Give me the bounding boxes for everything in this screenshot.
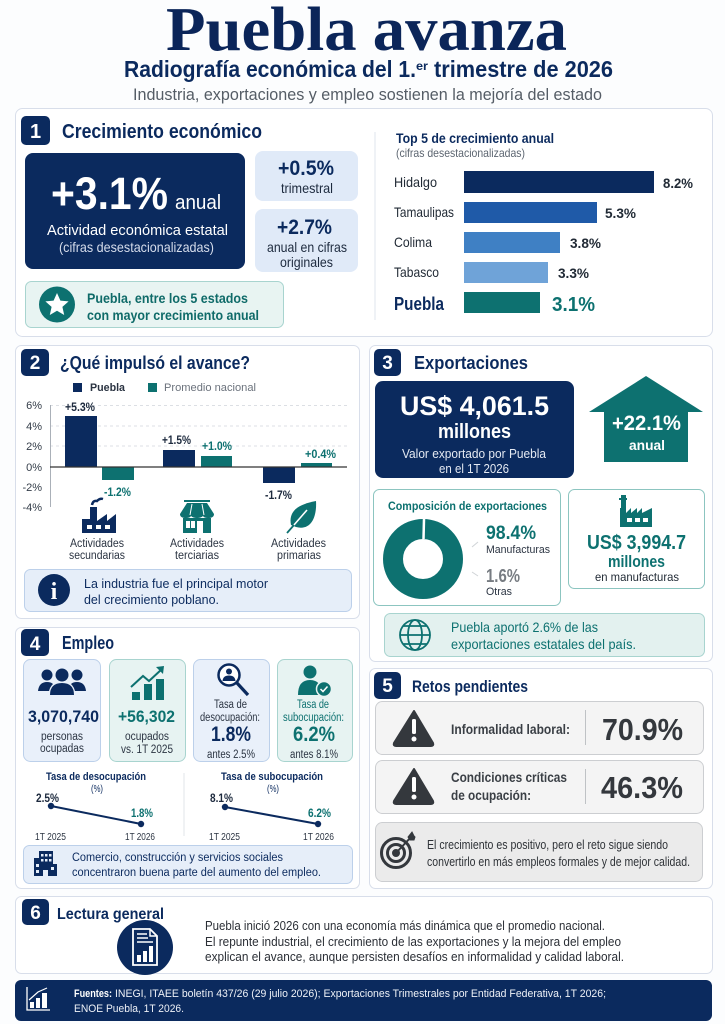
legend: Promedio nacional: [164, 382, 256, 394]
activity labels: Actividades: [271, 538, 326, 550]
KPI: +2.7% anual en cifras originales: originales: [280, 254, 333, 270]
subtitle: trimestre de 2026: [434, 56, 613, 82]
KPI: valor exportado: en el 1T 2026: [439, 461, 509, 476]
KPI: valor exportado: Valor exportado por Puebla: [402, 446, 547, 461]
bar chart: actividades: -1.2%: [104, 485, 131, 499]
reto: condiciones críticas: 46.3%: [601, 770, 683, 805]
section badge 4: [21, 629, 49, 656]
main KPI: +3.1% anual: Actividad económica estatal: [47, 222, 228, 239]
card: tasa de desocupación: 1.8%: [211, 723, 251, 746]
bar chart: actividades: 2%: [26, 441, 42, 453]
card: tasa de subocupación: Tasa de: [297, 699, 329, 711]
subtitle: [124, 56, 613, 82]
card: nuevos ocupados: +56,302: [118, 707, 175, 726]
panel: exportaciones de manufacturas: millones: [608, 552, 665, 571]
main KPI: +3.1% anual: (cifras desestacionalizadas): [59, 239, 214, 255]
activity labels: terciarias: [175, 550, 219, 562]
heading: empleo: Empleo: [62, 633, 114, 653]
icon: factory: [82, 499, 116, 533]
KPI: +0.5% trimestral: [255, 151, 358, 201]
bar chart: actividades: -2%: [22, 482, 42, 494]
line chart: tasa de desocupación: 1T 2026: [125, 832, 155, 843]
callout: industria: del crecimiento poblano.: [84, 592, 219, 607]
heading: retos pendientes: Retos pendientes: [412, 677, 528, 696]
reto: condiciones críticas: Condiciones críticas: [451, 770, 567, 785]
bar chart: actividades: -1.7%: [265, 488, 292, 502]
icon: info: i: [51, 579, 58, 605]
activity labels: Actividades: [70, 538, 124, 550]
reto: informalidad laboral: Informalidad laboral:: [451, 722, 570, 737]
line chart: tasa de desocupación: 2.5%: [36, 793, 59, 805]
section badge 2: 2: [30, 353, 40, 374]
icon: star: [39, 286, 75, 322]
panel: exportaciones de manufacturas: [568, 490, 704, 588]
text: lectura general: [205, 919, 624, 964]
footer: fuentes: INEGI, ITAEE boletín 437/26 (29 julio 2026); Exportaciones Trimestrales por Entidad Federativa, 1T 2026;: [115, 988, 606, 1000]
footer: fuentes: [15, 980, 712, 1021]
icon: person check: [298, 666, 332, 696]
icon: growth chart: [131, 666, 164, 700]
KPI: valor exportado: millones: [438, 421, 511, 443]
card: tasa de desocupación: Tasa de: [214, 699, 247, 711]
callout: comercio y construcción: Comercio, construcción y servicios sociales: [72, 852, 283, 864]
panel: exportaciones de manufacturas: US$ 3,994.7: [587, 532, 686, 554]
activity labels: [69, 538, 326, 562]
icon: store: [180, 500, 214, 533]
card: nuevos ocupados: ocupados: [125, 731, 169, 743]
bar chart: actividades: +0.4%: [305, 447, 336, 461]
line chart: tasa de desocupación: [35, 771, 155, 843]
text: lectura general: El repunte industrial, el crecimiento de las exportaciones y la mejora del empleo: [205, 935, 621, 949]
card: tasa de desocupación: desocupación:: [200, 712, 260, 724]
panel: composición de exportaciones: 98.4%: [486, 523, 536, 544]
section badge 5: [374, 672, 401, 699]
KPI: +2.7% anual en cifras originales: [255, 209, 358, 272]
line chart: tasa de desocupación: Tasa de desocupación: [46, 771, 146, 783]
bar chart: top 5 de crecimiento anual: Hidalgo: [394, 174, 437, 190]
bar chart: top 5 de crecimiento anual: Colima: [394, 234, 432, 250]
tagline: Industria, exportaciones y empleo sostienen la mejoría del estado: [133, 85, 602, 104]
callout: top 5 estados: Puebla, entre los 5 estados: [87, 290, 248, 306]
KPI: +0.5% trimestral: +0.5%: [278, 157, 334, 180]
icon: warning: [394, 711, 433, 746]
line chart: tasa de desocupación: (%): [91, 784, 103, 795]
callout: industria: [24, 570, 352, 612]
callout: aportación nacional: [384, 614, 704, 656]
panel: lectura general: [16, 896, 712, 975]
section badge 1: [21, 116, 50, 145]
section badge 1: 1: [30, 121, 41, 143]
panel: qué impulsó el avance: [16, 346, 360, 618]
panel: crecimiento económico: [16, 108, 712, 336]
card: tasa de desocupación: antes 2.5%: [207, 749, 255, 761]
icon: globe: [400, 620, 430, 650]
callout: reto empleo formal: El crecimiento es positivo, pero el reto sigue siendo: [427, 838, 668, 852]
line chart: tasa de desocupación: 1T 2025: [35, 832, 66, 843]
bar chart: actividades: +1.5%: [162, 433, 191, 447]
heading: lectura general: Lectura general: [57, 906, 164, 923]
line chart: tasa de subocupación: 6.2%: [308, 808, 331, 820]
card: tasa de subocupación: antes 8.1%: [290, 749, 338, 761]
panel: exportaciones: [370, 346, 712, 662]
bar chart: actividades: 4%: [26, 421, 42, 433]
bar chart: top 5 de crecimiento anual: Puebla: [394, 294, 445, 314]
heading: crecimiento económico: Crecimiento económico: [62, 121, 262, 143]
card: tasa de desocupación: [194, 660, 270, 762]
panel: composición de exportaciones: 1.6%: [486, 566, 520, 586]
callout: aportación nacional: Puebla aportó 2.6% de las: [451, 619, 598, 635]
bar chart: top 5 de crecimiento anual: 8.2%: [663, 175, 694, 191]
icon: chart: [27, 987, 50, 1010]
bar chart: actividades: +1.0%: [202, 439, 232, 453]
card: personas ocupadas: ocupadas: [40, 743, 84, 755]
bar chart: actividades: +5.3%: [65, 400, 95, 414]
heading: qué impulsó el avance: ¿Qué impulsó el avance?: [60, 353, 250, 373]
card: tasa de subocupación: subocupación:: [283, 712, 344, 724]
panel: retos pendientes: [370, 668, 712, 888]
panel: composición de exportaciones: Composición de exportaciones: [388, 499, 547, 513]
bar chart: top 5 de crecimiento anual: 3.1%: [552, 294, 595, 316]
bar chart: top 5 de crecimiento anual: 5.3%: [605, 205, 637, 221]
line chart: tasa de subocupación: 1T 2026: [303, 832, 334, 843]
text: lectura general: Puebla inició 2026 con una economía más dinámica que el promedio nacional.: [205, 919, 605, 933]
line chart: tasa de subocupación: Tasa de subocupación: [221, 771, 323, 783]
card: personas ocupadas: 3,070,740: [28, 707, 99, 726]
footer: fuentes: ENOE Puebla, 1T 2026.: [74, 1003, 184, 1015]
heading: exportaciones: Exportaciones: [414, 353, 528, 373]
callout: comercio y construcción: concentraron buena parte del aumento del empleo.: [72, 867, 321, 879]
KPI: +2.7% anual en cifras originales: +2.7%: [277, 216, 332, 239]
bar chart: actividades: 0%: [26, 462, 42, 474]
line chart: tasa de subocupación: (%): [267, 784, 279, 795]
activity labels: secundarias: [69, 550, 125, 562]
line chart: tasa de subocupación: 8.1%: [210, 793, 233, 805]
bar chart: actividades: [22, 400, 347, 514]
reto: informalidad laboral: 70.9%: [602, 712, 683, 747]
KPI: valor exportado: US$ 4,061.5: [400, 391, 549, 421]
icon: buildings: [34, 851, 57, 876]
section badge 3: 3: [382, 353, 393, 374]
card: nuevos ocupados: vs. 1T 2025: [121, 744, 173, 756]
reto: informalidad laboral: [376, 702, 704, 754]
bar chart: top 5 de crecimiento anual: Tamaulipas: [394, 204, 454, 220]
bar chart: top 5 de crecimiento anual: 3.8%: [570, 235, 602, 251]
panel: composición de exportaciones: Manufacturas: [486, 544, 550, 556]
card: personas ocupadas: [24, 660, 100, 762]
callout: top 5 estados: con mayor crecimiento anual: [87, 307, 259, 323]
icon: info: [38, 574, 70, 606]
line chart: tasa de subocupación: 1T 2025: [209, 832, 240, 843]
subtitle: er: [416, 59, 428, 73]
section badge 2: [21, 349, 49, 376]
legend: Puebla: [90, 382, 126, 394]
card: nuevos ocupados: [110, 660, 186, 762]
bar chart: actividades: -4%: [22, 502, 42, 514]
section badge 3: [374, 349, 401, 376]
arrow: +22.1% anual: [589, 376, 703, 462]
bar chart: top 5 de crecimiento anual: Top 5 de crecimiento anual: [396, 130, 554, 146]
icon: warning: [394, 769, 433, 804]
section badge 6: 6: [30, 903, 41, 924]
activity labels: primarias: [277, 550, 321, 562]
card: tasa de subocupación: 6.2%: [293, 723, 335, 746]
section badge 4: 4: [30, 634, 41, 655]
card: tasa de subocupación: [278, 660, 352, 762]
icon: target: [382, 832, 415, 868]
icon: factory teal: [619, 495, 652, 527]
KPI: +2.7% anual en cifras originales: anual en cifras: [267, 239, 347, 255]
bar chart: top 5 de crecimiento anual: (cifras desestacionalizadas): [396, 146, 525, 160]
KPI: +0.5% trimestral: trimestral: [281, 180, 333, 196]
bar chart: top 5 de crecimiento anual: Tabasco: [394, 264, 439, 280]
callout: comercio y construcción: [24, 846, 352, 884]
card: personas ocupadas: personas: [41, 731, 83, 743]
icon: people: [38, 668, 86, 695]
arrow: +22.1% anual: +22.1%: [612, 412, 681, 435]
callout: aportación nacional: exportaciones estatales del país.: [451, 636, 636, 652]
panel: empleo: [16, 628, 360, 888]
activity labels: Actividades: [170, 538, 224, 550]
text: lectura general: explican el avance, aunque persisten desafíos en informalidad y calidad laboral.: [205, 950, 624, 964]
donut chart: [393, 519, 453, 589]
footer: fuentes: Fuentes:: [74, 988, 112, 1000]
bar chart: actividades: 6%: [26, 400, 42, 412]
panel: composición de exportaciones: Otras: [486, 586, 512, 598]
reto: condiciones críticas: [376, 760, 704, 814]
subtitle: Radiografía económica del 1.: [124, 56, 416, 82]
KPI: valor exportado: [375, 381, 574, 478]
panel: composición de exportaciones: [374, 490, 560, 606]
reto: condiciones críticas: de ocupación:: [451, 788, 531, 803]
main KPI: +3.1% anual: anual: [175, 192, 221, 214]
icon: magnifier: [218, 664, 248, 695]
callout: industria: La industria fue el principal motor: [84, 576, 269, 591]
icon: document with chart: [117, 920, 173, 975]
section badge 6: [22, 899, 49, 925]
callout: top 5 estados: [26, 282, 284, 328]
line chart: tasa de subocupación: [209, 771, 334, 843]
header: [124, 0, 613, 104]
legend: [73, 382, 256, 394]
icon: leaf: [287, 501, 316, 533]
panel: exportaciones de manufacturas: en manufacturas: [595, 570, 679, 584]
callout: reto empleo formal: [376, 822, 702, 882]
section badge 5: 5: [382, 676, 393, 697]
main KPI: +3.1% anual: +3.1%: [51, 168, 168, 219]
bar chart: top 5 de crecimiento anual: 3.3%: [558, 265, 590, 281]
arrow: +22.1% anual: anual: [629, 437, 665, 453]
bar chart: top 5 de crecimiento anual: [394, 130, 694, 316]
line chart: tasa de desocupación: 1.8%: [131, 808, 153, 820]
main KPI: +3.1% anual: [25, 153, 245, 269]
